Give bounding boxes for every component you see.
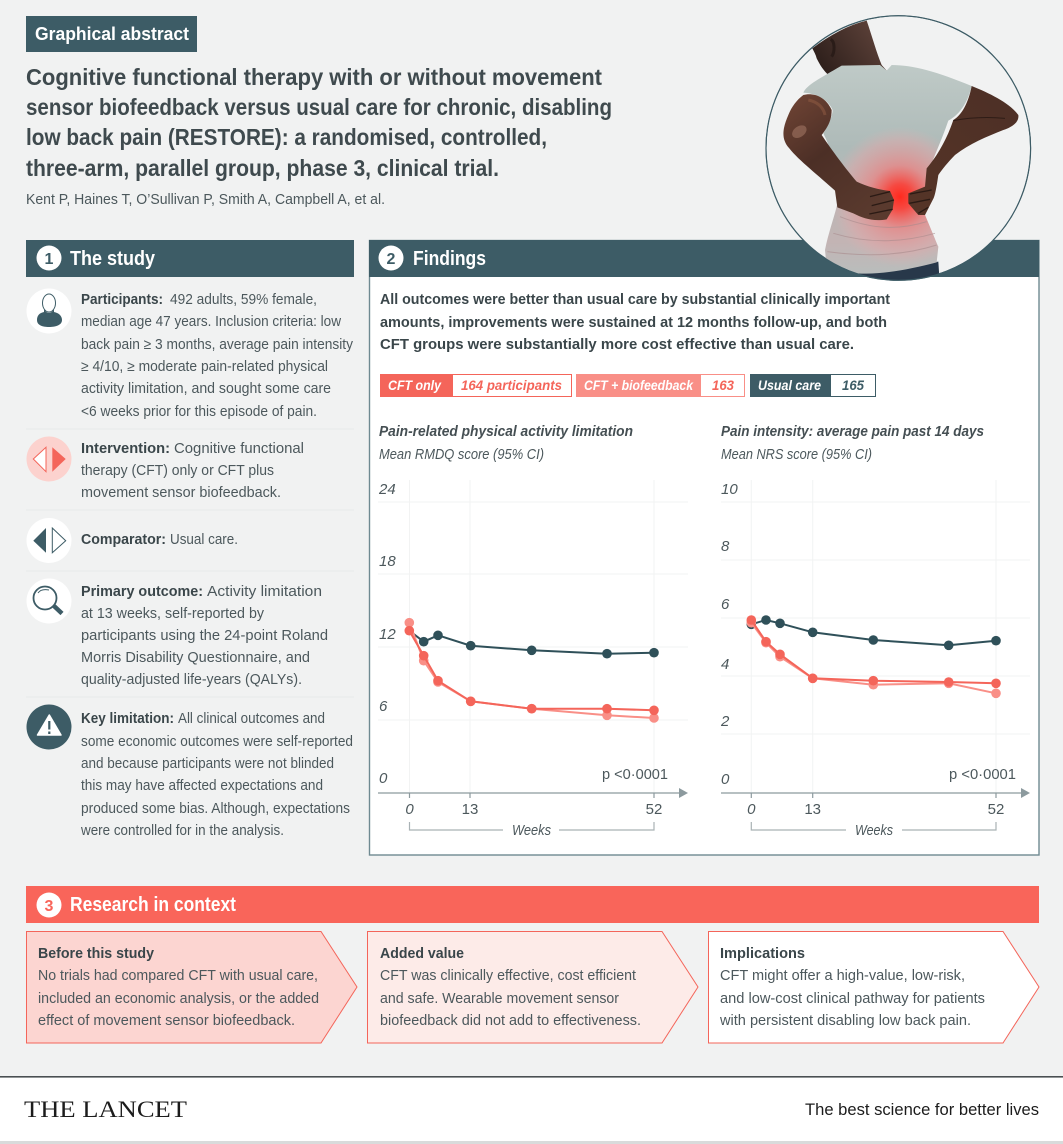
x axis: Weeks bbox=[855, 823, 893, 839]
text: comparator: Comparator: bbox=[81, 532, 166, 548]
arrow box: before this study: included an economic analysis, or the added bbox=[38, 991, 319, 1007]
badge: Graphical abstract: Graphical abstract bbox=[35, 24, 189, 44]
heading: research in context: 3 bbox=[45, 898, 54, 915]
x axis: 52 bbox=[988, 801, 1004, 818]
arrow box: implications: with persistent disabling low back pain. bbox=[719, 1013, 971, 1029]
heading: the study: The study bbox=[70, 248, 156, 270]
authors: Kent P, Haines T, O’Sullivan P, Smith A, Campbell A, et al. bbox=[26, 192, 385, 208]
heading: research in context bbox=[26, 886, 1039, 923]
text: primary outcome: at 13 weeks, self-reported by bbox=[81, 606, 265, 622]
y axis labels: 12 bbox=[379, 626, 396, 643]
text: primary outcome: participants using the 24-point Roland bbox=[81, 628, 328, 644]
chart title: pain intensity bbox=[721, 424, 984, 463]
heading: findings bbox=[369, 240, 1039, 277]
text: findings summary: All outcomes were better than usual care by substantial clinically important bbox=[380, 292, 890, 308]
x axis bbox=[721, 788, 1030, 839]
p value: p <0·0001 bbox=[949, 767, 1016, 783]
heading: the study: 1 bbox=[45, 251, 54, 268]
y axis labels: 24 bbox=[378, 481, 396, 498]
panel: findings bbox=[369, 240, 1039, 855]
title: three-arm, parallel group, phase 3, clinical trial. bbox=[26, 155, 499, 181]
text: participants: 492 adults, 59% female, bbox=[170, 292, 317, 308]
arrow box: before this study: Before this study bbox=[38, 946, 154, 962]
text: key limitation: this may have affected expectations and bbox=[81, 778, 323, 794]
legend: CFT only bbox=[380, 374, 572, 397]
series: CFT only bbox=[746, 615, 1001, 688]
series: CFT plus biofeedback bbox=[404, 618, 659, 723]
chart title: pain intensity: Mean NRS score (95% CI) bbox=[721, 447, 872, 463]
heading: findings: Findings bbox=[413, 248, 486, 270]
y axis labels: 0 bbox=[721, 771, 730, 788]
chart title: pain intensity: Pain intensity: average pain past 14 days bbox=[721, 424, 984, 440]
legend: CFT only: CFT only bbox=[388, 377, 442, 393]
photo: man holding lower back bbox=[766, 16, 1031, 287]
arrow box: implications bbox=[708, 932, 1039, 1043]
arrow box: before this study: effect of movement sensor biofeedback. bbox=[38, 1013, 295, 1029]
y axis labels: 6 bbox=[721, 596, 730, 613]
y axis labels: 4 bbox=[721, 656, 729, 673]
x axis: 0 bbox=[747, 801, 756, 818]
tagline: The best science for better lives bbox=[805, 1101, 1039, 1119]
arrow box: before this study bbox=[26, 932, 357, 1043]
text: participants: back pain ≥ 3 months, average pain intensity bbox=[81, 337, 354, 353]
panel: the study bbox=[26, 240, 354, 839]
arrow box: added value bbox=[368, 932, 698, 1043]
y axis labels: 6 bbox=[379, 698, 388, 715]
heading: research in context: Research in context bbox=[70, 894, 236, 916]
series: usual care bbox=[409, 630, 659, 658]
arrow box: added value: CFT was clinically effective, cost efficient bbox=[380, 968, 636, 984]
text: intervention: Cognitive functional bbox=[174, 441, 304, 457]
x axis: 52 bbox=[646, 801, 662, 818]
text: primary outcome: quality-adjusted life-years (QALYs). bbox=[81, 672, 302, 688]
footer bbox=[0, 1076, 1063, 1144]
panel: research in context bbox=[26, 886, 1039, 1043]
series: CFT only bbox=[404, 626, 659, 715]
chart: pain intensity bbox=[720, 424, 1030, 839]
icon: comparator arrows bbox=[26, 518, 72, 563]
y axis labels: 2 bbox=[720, 713, 730, 730]
text: participants: ≥ 4/10, ≥ moderate pain-related physical bbox=[81, 359, 328, 375]
x axis: 13 bbox=[804, 801, 821, 818]
legend bbox=[380, 374, 876, 397]
text: primary outcome: Morris Disability Questionnaire, and bbox=[81, 650, 310, 666]
y axis labels bbox=[720, 481, 738, 788]
text: key limitation: and because participants were not blinded bbox=[81, 756, 334, 772]
legend: CFT + biofeedback: 163 bbox=[712, 377, 734, 393]
heading: the study bbox=[26, 240, 354, 277]
series: usual care bbox=[746, 615, 1001, 650]
chart title: activity limitation: Mean RMDQ score (95% CI) bbox=[379, 447, 544, 463]
text: key limitation: Key limitation: bbox=[81, 711, 174, 727]
series: CFT plus biofeedback bbox=[746, 618, 1001, 698]
text: findings summary bbox=[380, 292, 890, 353]
text: key limitation: All clinical outcomes and bbox=[178, 711, 325, 727]
legend: usual care: Usual care bbox=[758, 377, 821, 393]
x axis: Weeks bbox=[512, 823, 551, 839]
title bbox=[26, 64, 612, 181]
chart title: activity limitation: Pain-related physical activity limitation bbox=[379, 424, 633, 440]
text: key limitation: were controlled for in the analysis. bbox=[80, 823, 284, 839]
legend: usual care: 165 bbox=[842, 377, 864, 393]
icon: warning bbox=[26, 704, 72, 750]
arrow box: added value: Added value bbox=[380, 946, 464, 962]
text: participants bbox=[81, 292, 354, 420]
y axis labels: 10 bbox=[721, 481, 738, 498]
y axis labels: 0 bbox=[379, 770, 388, 787]
y axis labels: 8 bbox=[721, 538, 730, 555]
text: primary outcome: Activity limitation bbox=[207, 584, 322, 600]
x axis: 0 bbox=[405, 801, 414, 818]
text: findings summary: amounts, improvements were sustained at 12 months follow-up, and both bbox=[380, 315, 887, 331]
arrow box: implications: Implications bbox=[720, 946, 805, 962]
text: findings summary: CFT groups were substantially more cost effective than usual care. bbox=[380, 337, 854, 353]
text: key limitation bbox=[80, 711, 353, 839]
text: intervention: movement sensor biofeedback. bbox=[81, 485, 281, 501]
text: participants: Participants: bbox=[81, 292, 163, 308]
icon: person bbox=[26, 288, 72, 334]
text: participants: activity limitation, and sought some care bbox=[81, 381, 331, 397]
text: key limitation: some economic outcomes were self-reported bbox=[81, 734, 353, 750]
icon: magnifier bbox=[26, 578, 72, 624]
chart: activity limitation bbox=[378, 424, 688, 839]
legend: CFT only: 164 participants bbox=[461, 377, 562, 393]
legend: CFT + biofeedback: CFT + biofeedback bbox=[584, 377, 694, 393]
arrow box: before this study: No trials had compared CFT with usual care, bbox=[38, 968, 318, 984]
logo: The Lancet: THE LANCET bbox=[24, 1097, 187, 1122]
text: primary outcome bbox=[81, 584, 328, 688]
y axis labels: 18 bbox=[379, 553, 396, 570]
text: intervention bbox=[81, 441, 304, 501]
title: low back pain (RESTORE): a randomised, controlled, bbox=[26, 124, 547, 150]
icon: intervention arrows bbox=[26, 436, 72, 482]
title: Cognitive functional therapy with or without movement bbox=[26, 64, 602, 90]
p value: p <0·0001 bbox=[602, 767, 668, 783]
x axis bbox=[378, 788, 688, 839]
text: intervention: therapy (CFT) only or CFT plus bbox=[81, 463, 274, 479]
legend: CFT + biofeedback bbox=[576, 374, 744, 397]
text: comparator bbox=[81, 532, 238, 548]
text: key limitation: produced some bias. Although, expectations bbox=[81, 801, 350, 817]
legend: usual care bbox=[750, 374, 876, 397]
text: primary outcome: Primary outcome: bbox=[81, 584, 203, 600]
arrow box: implications: CFT might offer a high-value, low-risk, bbox=[720, 968, 965, 984]
heading: findings: 2 bbox=[387, 251, 396, 268]
chart title: activity limitation bbox=[379, 424, 633, 463]
arrow box: added value: and safe. Wearable movement sensor bbox=[380, 991, 619, 1007]
text: intervention: Intervention: bbox=[81, 441, 170, 457]
title: sensor biofeedback versus usual care for chronic, disabling bbox=[26, 94, 612, 120]
badge: Graphical abstract bbox=[26, 16, 197, 52]
arrow box: added value: biofeedback did not add to effectiveness. bbox=[380, 1013, 641, 1029]
x axis: 13 bbox=[462, 801, 478, 818]
text: participants: <6 weeks prior for this episode of pain. bbox=[81, 404, 317, 420]
text: comparator: Usual care. bbox=[170, 532, 238, 548]
text: participants: median age 47 years. Inclusion criteria: low bbox=[81, 314, 341, 330]
y axis labels bbox=[378, 481, 396, 787]
arrow box: implications: and low-cost clinical pathway for patients bbox=[720, 991, 985, 1007]
